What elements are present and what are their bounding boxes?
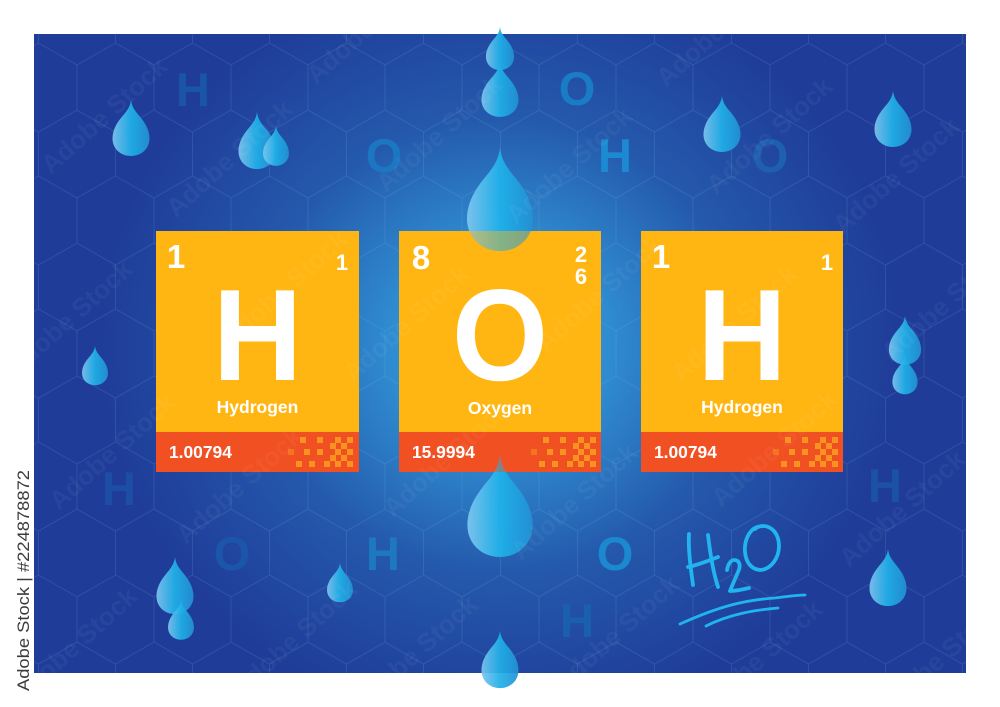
- Adobe Stock watermarks: Adobe Stock: [505, 437, 643, 566]
- Adobe Stock watermarks: Adobe Stock: [377, 394, 515, 523]
- element symbol: H: [213, 262, 302, 408]
- water drops behind the cards: [82, 27, 921, 688]
- atomic mass: 1.00794: [169, 442, 232, 462]
- panel: hydrogen card left: [156, 231, 359, 472]
- translucent drop overlaps on the oxygen card: [467, 148, 533, 557]
- Adobe Stock watermarks: Adobe Stock: [547, 569, 685, 698]
- Adobe Stock watermarks: Adobe Stock: [43, 387, 181, 516]
- Adobe Stock watermarks: Adobe Stock: [370, 69, 508, 198]
- background element letters: H: [176, 63, 210, 116]
- underlines: [680, 595, 805, 624]
- element name: Hydrogen: [701, 397, 783, 417]
- pixel pattern: [531, 437, 596, 467]
- Adobe Stock watermarks: Adobe Stock: [500, 101, 638, 230]
- background element letters: O: [597, 527, 633, 580]
- electron shells: 2: [575, 242, 587, 267]
- Adobe Stock watermarks: Adobe Stock: [530, 229, 668, 358]
- background element letters: O: [559, 62, 595, 115]
- background element letters: H: [868, 459, 902, 512]
- background element letters: O: [214, 527, 250, 580]
- Adobe Stock watermarks: Adobe Stock: [170, 421, 308, 550]
- Adobe Stock watermarks: Adobe Stock: [833, 444, 971, 573]
- Adobe Stock watermarks: Adobe Stock: [160, 94, 298, 223]
- stock id side text: Adobe Stock | #224878872: [15, 470, 33, 691]
- Adobe Stock watermarks: Adobe Stock: [225, 574, 363, 703]
- background element letters: H: [598, 129, 632, 182]
- Adobe Stock watermarks: Adobe Stock: [0, 254, 138, 383]
- background element letters: H: [366, 527, 400, 580]
- pixel pattern: [288, 437, 353, 467]
- Adobe Stock watermarks: Adobe Stock: [700, 71, 838, 200]
- electron shell: 1: [336, 250, 348, 275]
- atomic mass: 1.00794: [654, 442, 717, 462]
- Adobe Stock watermarks: Adobe Stock: [35, 51, 173, 180]
- handwritten H2O: [680, 526, 805, 624]
- Adobe Stock watermarks: Adobe Stock: [827, 111, 965, 240]
- Adobe Stock watermarks: Adobe Stock: [705, 384, 843, 513]
- atomic number: 8: [412, 239, 430, 276]
- pixel pattern: [773, 437, 838, 467]
- element symbol: O: [452, 262, 548, 408]
- Adobe Stock watermarks: Adobe Stock: [5, 581, 143, 707]
- element symbol: H: [697, 262, 787, 408]
- second underline: [706, 608, 778, 626]
- electron shell: 1: [821, 250, 833, 275]
- background element letters: [102, 62, 902, 647]
- electron shell second line: 6: [575, 264, 587, 289]
- atomic number: 1: [652, 238, 670, 275]
- panel: oxygen card: [399, 231, 601, 472]
- atomic mass: 15.9994: [412, 442, 475, 462]
- atomic number: 1: [167, 238, 185, 275]
- background element letters: H: [560, 594, 594, 647]
- element name: Hydrogen: [217, 397, 298, 417]
- panel: hydrogen card right: [641, 231, 843, 472]
- background element letters: O: [752, 129, 788, 182]
- Adobe Stock watermarks: Adobe Stock: [337, 259, 475, 388]
- background element letters: H: [102, 462, 136, 515]
- Adobe Stock watermarks: Adobe Stock: [665, 259, 803, 388]
- background element letters: O: [366, 129, 402, 182]
- Adobe Stock watermarks: Adobe Stock: [215, 224, 353, 353]
- element name: Oxygen: [468, 398, 532, 418]
